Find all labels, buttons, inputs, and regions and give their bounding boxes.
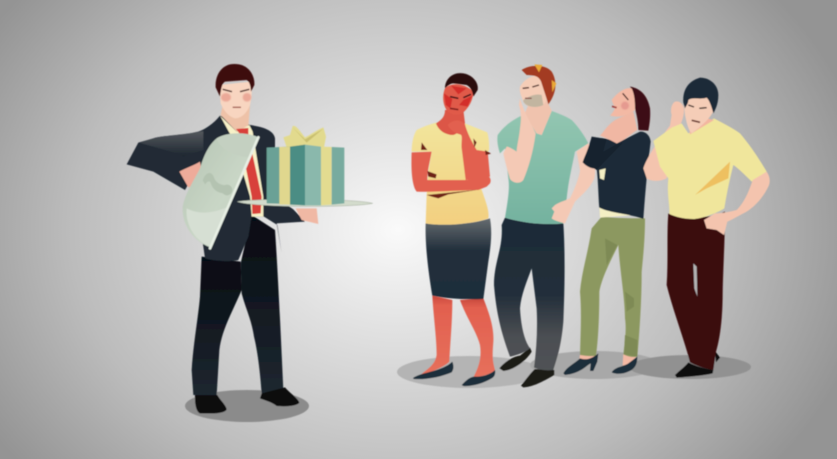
leg gap	[693, 263, 697, 297]
front shoe	[675, 362, 713, 378]
trousers	[667, 212, 725, 370]
hair	[522, 64, 556, 104]
legs	[418, 296, 495, 377]
gift box	[267, 126, 344, 205]
waiter jacket	[127, 116, 305, 261]
figure: woman in black jacket	[563, 87, 651, 375]
jacket sleeve	[583, 137, 623, 170]
hair	[445, 73, 478, 97]
clothing folds	[421, 138, 491, 198]
hair	[630, 87, 650, 131]
hair	[683, 78, 718, 113]
trousers	[580, 217, 645, 357]
waiter trousers	[192, 215, 283, 395]
head	[443, 84, 473, 115]
figure: woman in yellow top	[411, 73, 495, 386]
waiter hair	[216, 64, 254, 97]
raised arm	[503, 98, 536, 183]
shirt fold	[695, 162, 730, 195]
trousers	[494, 218, 565, 370]
ankles	[579, 354, 637, 366]
waiter shirt glimpse	[175, 157, 191, 165]
raised arm	[448, 120, 490, 180]
cloche knob	[203, 173, 232, 195]
neck and hand	[600, 112, 637, 143]
t-shirt	[497, 111, 588, 224]
head	[520, 76, 550, 107]
waiter hand on cloche	[179, 162, 204, 187]
head	[683, 96, 716, 133]
top	[412, 123, 489, 225]
shoes	[413, 362, 495, 386]
shadow: waiter	[185, 390, 309, 422]
shirt	[599, 207, 635, 218]
shadow: group	[397, 351, 751, 388]
head	[610, 88, 635, 117]
arm on hip	[704, 172, 770, 235]
shoes	[563, 353, 637, 375]
figure: man in yellow shirt	[643, 78, 770, 378]
scene	[127, 64, 770, 422]
arm on hip	[552, 143, 595, 223]
neck	[524, 100, 552, 135]
trouser shading	[605, 238, 637, 357]
shirt	[653, 118, 767, 219]
waiter shoes	[195, 387, 299, 414]
waiter face	[219, 82, 252, 118]
raised arm	[643, 101, 684, 181]
bow	[283, 126, 326, 147]
figure: waiter	[127, 64, 373, 414]
tray	[237, 199, 373, 206]
jacket	[583, 132, 651, 219]
waiter sleeve highlight	[140, 131, 203, 157]
cloche	[183, 133, 258, 248]
back shoe	[715, 351, 720, 362]
waiter tie	[236, 128, 262, 214]
waiter neck	[221, 105, 250, 132]
waiter shirt	[220, 116, 263, 217]
waiter hand under tray	[296, 208, 318, 224]
figure: man in teal t-shirt	[494, 64, 595, 387]
neck	[688, 118, 714, 134]
skirt	[426, 218, 491, 299]
folded arm	[411, 152, 491, 192]
shirt at chest	[599, 168, 606, 180]
shoes	[499, 348, 554, 387]
neck	[436, 110, 465, 135]
